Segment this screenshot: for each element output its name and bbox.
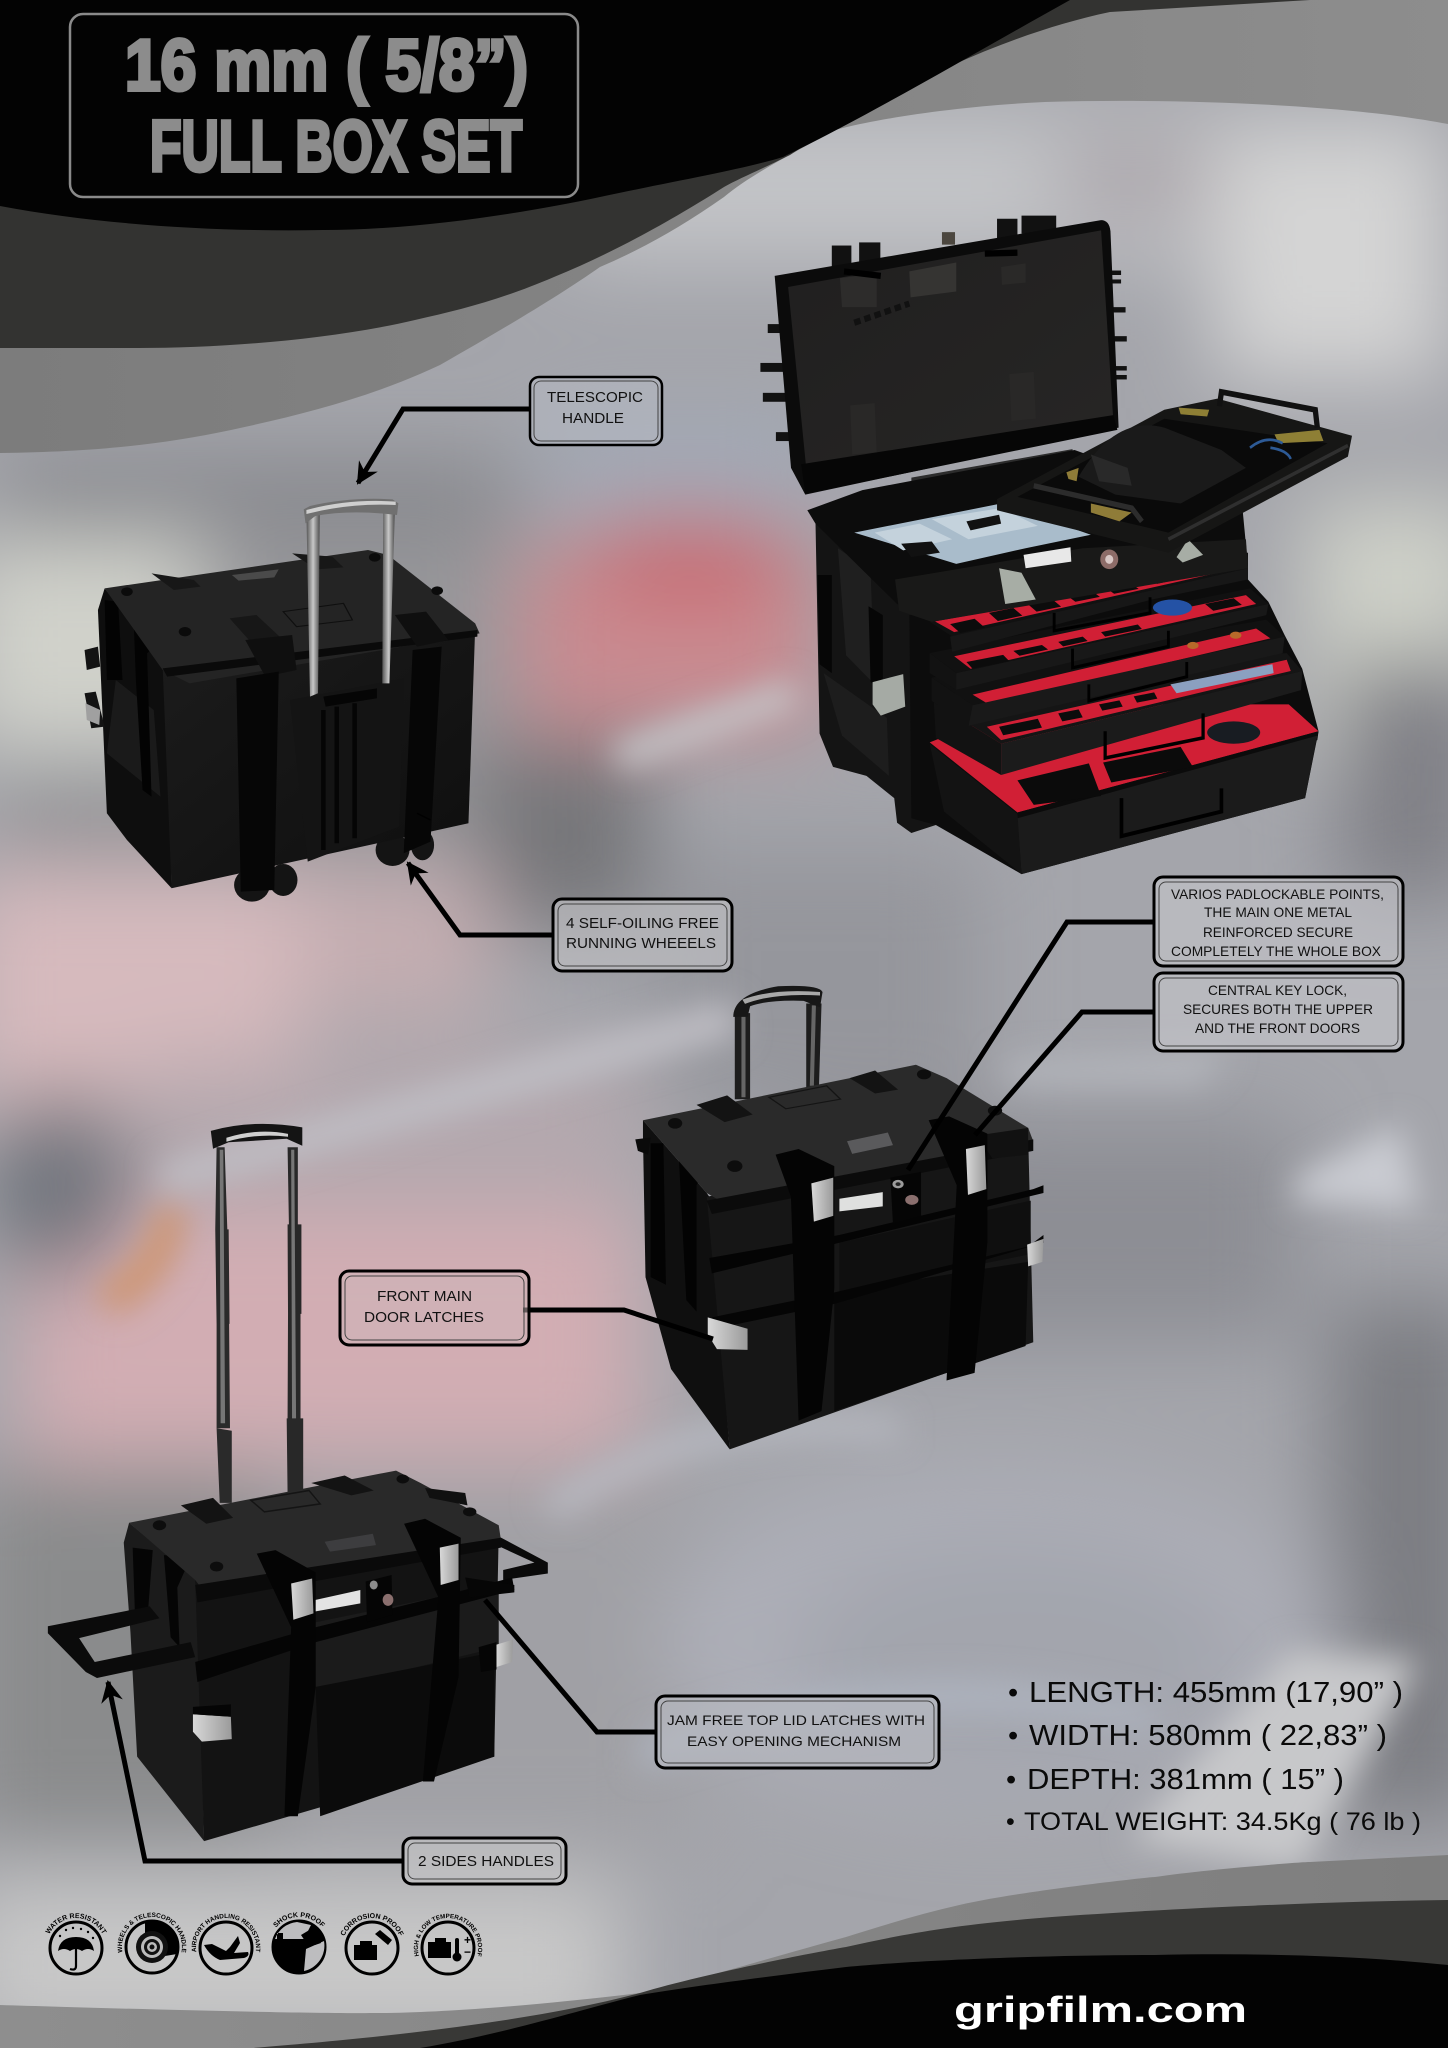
feature icons row xyxy=(45,1912,482,1976)
metal latches xyxy=(291,1578,313,1620)
top wave: black band xyxy=(0,0,1070,230)
band xyxy=(195,1578,514,1682)
callout: padlockable points: REINFORCED SECURE xyxy=(1203,924,1353,940)
callout: jam free latches xyxy=(656,1696,939,1768)
icon: high and low temperature proof xyxy=(414,1914,482,1976)
dimensions and weight list: • xyxy=(1006,1808,1015,1836)
dimensions and weight list: WIDTH: 580mm ( 22,83” ) xyxy=(1029,1720,1387,1752)
leader arrow: side handles xyxy=(108,1682,403,1861)
icon: corrosion proof xyxy=(340,1913,404,1976)
drawer 3 xyxy=(932,620,1285,726)
front face xyxy=(195,1533,499,1841)
telescopic handle xyxy=(215,1147,232,1503)
side xyxy=(98,588,172,888)
drawer 5 xyxy=(930,704,1319,874)
callout: front main door latches: FRONT MAIN xyxy=(377,1289,472,1305)
leader arrow: telescopic handle xyxy=(358,409,530,483)
handle xyxy=(735,1004,822,1099)
metal lock bar and latches xyxy=(1024,547,1071,568)
straps xyxy=(776,1149,834,1421)
callout: padlockable points: COMPLETELY THE WHOLE BOX xyxy=(1171,943,1382,959)
bottom wave: dark grey band xyxy=(253,1900,1448,2048)
upper body and rim xyxy=(807,450,1248,622)
callout: telescopic handle: TELESCOPIC xyxy=(547,390,643,406)
icon: wheels and telescopic handle xyxy=(118,1912,186,1974)
metal latches xyxy=(811,1178,833,1222)
callout: wheels: RUNNING WHEEELS xyxy=(566,936,716,952)
organizer tray xyxy=(854,504,1091,564)
callout: central key lock: CENTRAL KEY LOCK, xyxy=(1208,982,1347,998)
icon: high and low temperature proof: HIGH & LOW TEMPERATURE PROOF xyxy=(414,1914,482,1957)
callout: central key lock: SECURES BOTH THE UPPER xyxy=(1183,1001,1373,1017)
leader line: key lock xyxy=(975,1012,1154,1135)
callout: padlockable points xyxy=(1154,877,1403,966)
telescopic handle xyxy=(306,513,320,697)
lid hinges and tabs xyxy=(760,216,1127,441)
callout: central key lock xyxy=(1154,973,1403,1051)
product photo: rear view with wheels xyxy=(85,499,480,902)
callout: wheels: 4 SELF-OILING FREE xyxy=(566,916,719,932)
drawer 2 xyxy=(930,588,1268,690)
website logo: gripfilm.com xyxy=(954,1989,1247,2030)
left side xyxy=(643,1120,730,1449)
icon: corrosion proof: CORROSION PROOF xyxy=(340,1913,404,1936)
callout: front main door latches: DOOR LATCHES xyxy=(364,1310,484,1326)
callout: central key lock: AND THE FRONT DOORS xyxy=(1195,1020,1360,1036)
band xyxy=(709,1185,1043,1273)
front posts and trolley plate xyxy=(236,647,442,892)
icon: airport handling resistant xyxy=(192,1914,260,1976)
product photo: front view with latches xyxy=(635,986,1043,1449)
top face xyxy=(643,1065,1033,1206)
dimensions and weight list: LENGTH: 455mm (17,90” ) xyxy=(1029,1677,1403,1709)
tool tray xyxy=(997,392,1352,553)
icon: wheels and telescopic handle: WHEELS & TELESCOPIC HANDLE xyxy=(118,1912,186,1953)
front face xyxy=(163,628,475,888)
dimensions and weight list: TOTAL WEIGHT: 34.5Kg ( 76 lb ) xyxy=(1024,1808,1421,1836)
icon: water resistant: WATER RESISTANT xyxy=(45,1913,107,1934)
lock and bar xyxy=(316,1590,360,1611)
dimensions and weight list: • xyxy=(1006,1764,1016,1796)
callout: padlockable points: THE MAIN ONE METAL xyxy=(1204,904,1352,920)
callout: side handles: 2 SIDES HANDLES xyxy=(418,1854,554,1870)
top wave: medium grey band xyxy=(0,0,1448,453)
bottom wave: medium grey band xyxy=(0,1855,1448,2048)
drawer 4 xyxy=(934,653,1302,775)
dimensions and weight list: • xyxy=(1008,1677,1018,1709)
lock and bar xyxy=(839,1192,883,1211)
icon: shock proof xyxy=(272,1912,326,1974)
product photo: open case with drawers xyxy=(760,216,1352,874)
icon: high and low temperature proof: − xyxy=(464,1945,471,1959)
top face xyxy=(105,550,480,683)
product photo: case with extended handle and side handles xyxy=(48,1124,548,1841)
dimensions and weight list: DEPTH: 381mm ( 15” ) xyxy=(1027,1764,1344,1796)
lid xyxy=(775,220,1119,495)
left side handle xyxy=(48,1606,195,1678)
case body side xyxy=(815,521,936,833)
leader line: padlock points xyxy=(908,922,1154,1170)
right side handle xyxy=(496,1535,548,1580)
title box: 16 mm ( 5/8”) xyxy=(125,26,528,106)
callout: padlockable points: VARIOS PADLOCKABLE POINTS, xyxy=(1171,886,1384,902)
dimensions and weight list xyxy=(1006,1677,1421,1836)
callout: front main door latches xyxy=(340,1271,529,1345)
top face xyxy=(129,1471,501,1597)
callout: jam free latches: JAM FREE TOP LID LATCHES WITH xyxy=(667,1712,925,1728)
callout: wheels xyxy=(553,899,732,971)
straps xyxy=(257,1550,316,1816)
icon: water resistant xyxy=(45,1913,107,1976)
title box xyxy=(70,14,578,197)
icon: high and low temperature proof: + xyxy=(464,1933,471,1947)
icon: airport handling resistant: AIRPORT HANDLING RESISTANT xyxy=(192,1914,260,1952)
bottom wave: black band xyxy=(420,1954,1448,2048)
leader line: top lid latches xyxy=(485,1600,656,1732)
drawer 1 xyxy=(930,557,1248,652)
dimensions and weight list: • xyxy=(1008,1720,1018,1752)
drawer stack backing xyxy=(909,553,1319,874)
top wave: dark grey band xyxy=(0,0,1310,348)
icon: shock proof: SHOCK PROOF xyxy=(273,1912,326,1927)
title box: FULL BOX SET xyxy=(150,107,522,187)
callout: side handles xyxy=(403,1838,566,1884)
callout: telescopic handle xyxy=(530,377,662,445)
callout: jam free latches: EASY OPENING MECHANISM xyxy=(687,1733,901,1749)
leader arrow: wheels xyxy=(408,863,553,935)
leader arrow: door latches xyxy=(523,1310,713,1339)
wheels xyxy=(234,830,434,902)
front face xyxy=(707,1136,1033,1449)
callout: telescopic handle: HANDLE xyxy=(562,411,624,427)
left side xyxy=(124,1523,204,1841)
jam latch detail xyxy=(465,1578,514,1597)
